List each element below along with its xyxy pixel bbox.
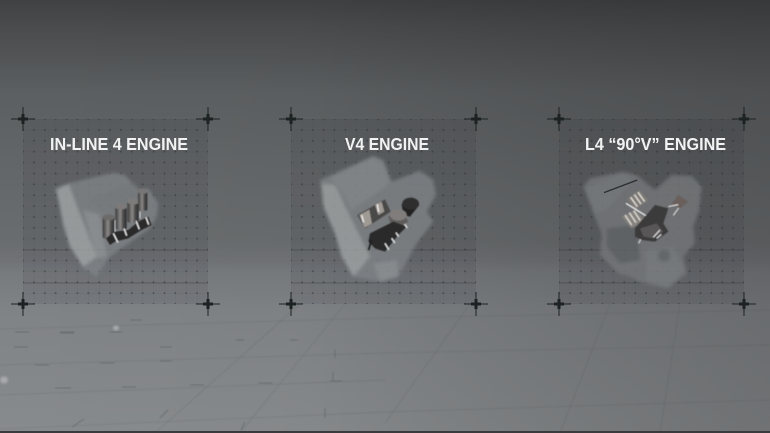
background: studio wall [0, 0, 770, 262]
pistons [102, 189, 148, 238]
grid: V4 [291, 119, 476, 304]
panel: in-line 4 engine [11, 107, 220, 316]
panel: L4 90-degree V engine [547, 107, 756, 316]
background: studio floor [0, 250, 770, 433]
crosshair markers: V4 [279, 107, 488, 316]
pistons [357, 197, 419, 232]
heading: in-line 4 engine: IN-LINE 4 ENGINE [50, 134, 188, 154]
grid: in-line 4 [23, 119, 208, 304]
engine illustration: L4 90V [583, 172, 702, 288]
crankshaft [106, 212, 152, 245]
crosshair markers: in-line 4 [11, 107, 220, 316]
grid: L4 90V [559, 119, 744, 304]
panel: V4 engine [279, 107, 488, 316]
heading: L4 90V engine: L4 “90°V” ENGINE [585, 134, 726, 154]
background: bottom edge [0, 431, 770, 433]
engine illustration: V4 [320, 156, 436, 282]
crankshaft [368, 222, 407, 252]
crosshair markers: L4 90V [547, 107, 756, 316]
heading: V4 engine: V4 ENGINE [345, 134, 429, 154]
engine illustration: in-line 4 [55, 173, 158, 277]
crankshaft [635, 205, 668, 243]
pistons [622, 190, 688, 228]
